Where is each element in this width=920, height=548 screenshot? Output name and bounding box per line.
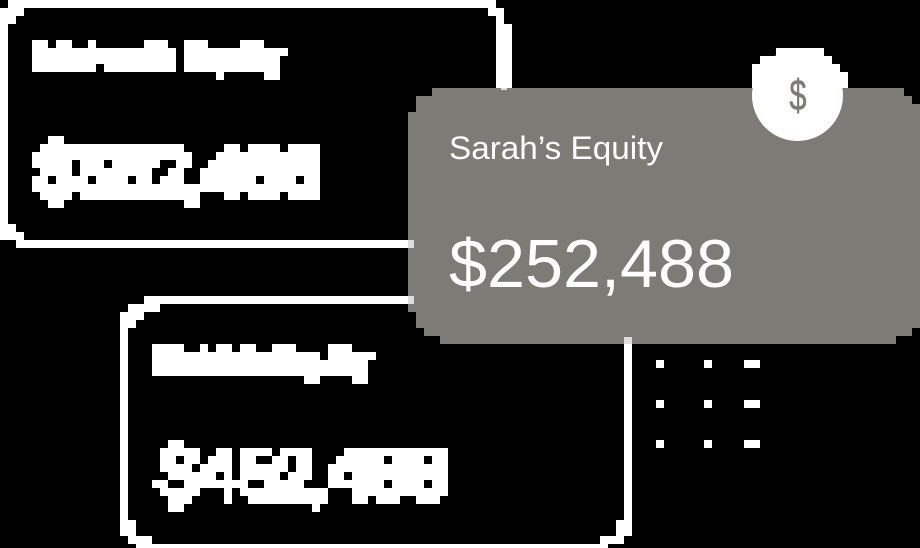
icon: dollar badge: $ bbox=[789, 72, 807, 120]
decorative dot grid bbox=[656, 360, 760, 448]
outline stubs overlapping the card edge bbox=[408, 88, 632, 344]
card outline bbox=[0, 0, 512, 248]
panel: first equity card bbox=[0, 0, 512, 248]
amount: pixelated value: $282,488 bbox=[32, 131, 320, 207]
heading: pixelated name: Michael’s Equity bbox=[32, 46, 288, 79]
card outline bbox=[120, 296, 632, 548]
amount: $252,488: $252,488 bbox=[449, 226, 734, 302]
heading: Sarah's Equity: Sarah’s Equity bbox=[449, 130, 663, 166]
card background bbox=[408, 88, 920, 344]
icon: dollar badge bbox=[752, 48, 848, 141]
panel: Sarah's equity card bbox=[408, 88, 920, 344]
panel: second equity card bbox=[120, 296, 632, 548]
amount: pixelated value: $452,488 bbox=[152, 435, 448, 511]
heading: pixelated name: Rachel’s Equity bbox=[152, 350, 376, 383]
